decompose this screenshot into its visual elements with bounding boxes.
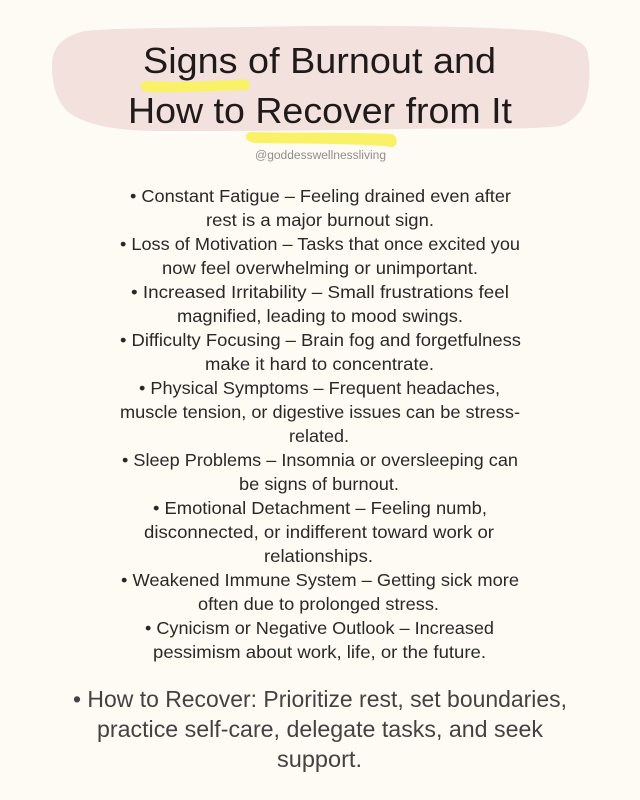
burnout signs list: • Sleep Problems – Insomnia or oversleeping can bbox=[122, 450, 518, 470]
burnout signs list: related. bbox=[289, 426, 349, 446]
highlight: under Signs bbox=[141, 79, 250, 92]
burnout signs list: muscle tension, or digestive issues can be stress- bbox=[120, 402, 520, 422]
highlight: under Recover bbox=[246, 132, 397, 147]
burnout signs list: • Increased Irritability – Small frustrations feel bbox=[131, 282, 509, 302]
title: How to Recover from It bbox=[128, 90, 512, 131]
burnout signs list: pessimism about work, life, or the future. bbox=[153, 642, 486, 662]
burnout signs list: • Difficulty Focusing – Brain fog and forgetfulness bbox=[120, 330, 521, 350]
burnout signs list: • Loss of Motivation – Tasks that once excited you bbox=[120, 234, 520, 254]
burnout signs list: • Constant Fatigue – Feeling drained even after bbox=[130, 186, 511, 206]
burnout signs list: often due to prolonged stress. bbox=[198, 594, 439, 614]
burnout signs list: disconnected, or indifferent toward work or bbox=[144, 522, 494, 542]
burnout signs list: now feel overwhelming or unimportant. bbox=[162, 258, 478, 278]
burnout signs list: magnified, leading to mood swings. bbox=[177, 306, 463, 326]
how to recover text: • How to Recover: Prioritize rest, set boundaries, bbox=[73, 686, 567, 712]
how to recover text: practice self-care, delegate tasks, and seek bbox=[97, 716, 543, 742]
how to recover text bbox=[73, 686, 567, 772]
how to recover text: support. bbox=[277, 746, 362, 772]
title: Signs of Burnout and bbox=[143, 40, 496, 81]
burnout signs list bbox=[120, 186, 521, 662]
burnout signs list: relationships. bbox=[264, 546, 373, 566]
burnout signs list: • Cynicism or Negative Outlook – Increased bbox=[145, 618, 494, 638]
header banner: pink brush stroke bbox=[52, 26, 590, 131]
burnout signs list: • Physical Symptoms – Frequent headaches, bbox=[139, 378, 500, 398]
burnout signs list: • Weakened Immune System – Getting sick more bbox=[121, 570, 519, 590]
burnout signs list: rest is a major burnout sign. bbox=[206, 210, 434, 230]
handle: @goddesswellnessliving bbox=[255, 150, 386, 162]
burnout signs list: • Emotional Detachment – Feeling numb, bbox=[153, 498, 487, 518]
burnout signs list: make it hard to concentrate. bbox=[205, 354, 434, 374]
title bbox=[128, 40, 512, 131]
burnout signs list: be signs of burnout. bbox=[239, 474, 399, 494]
